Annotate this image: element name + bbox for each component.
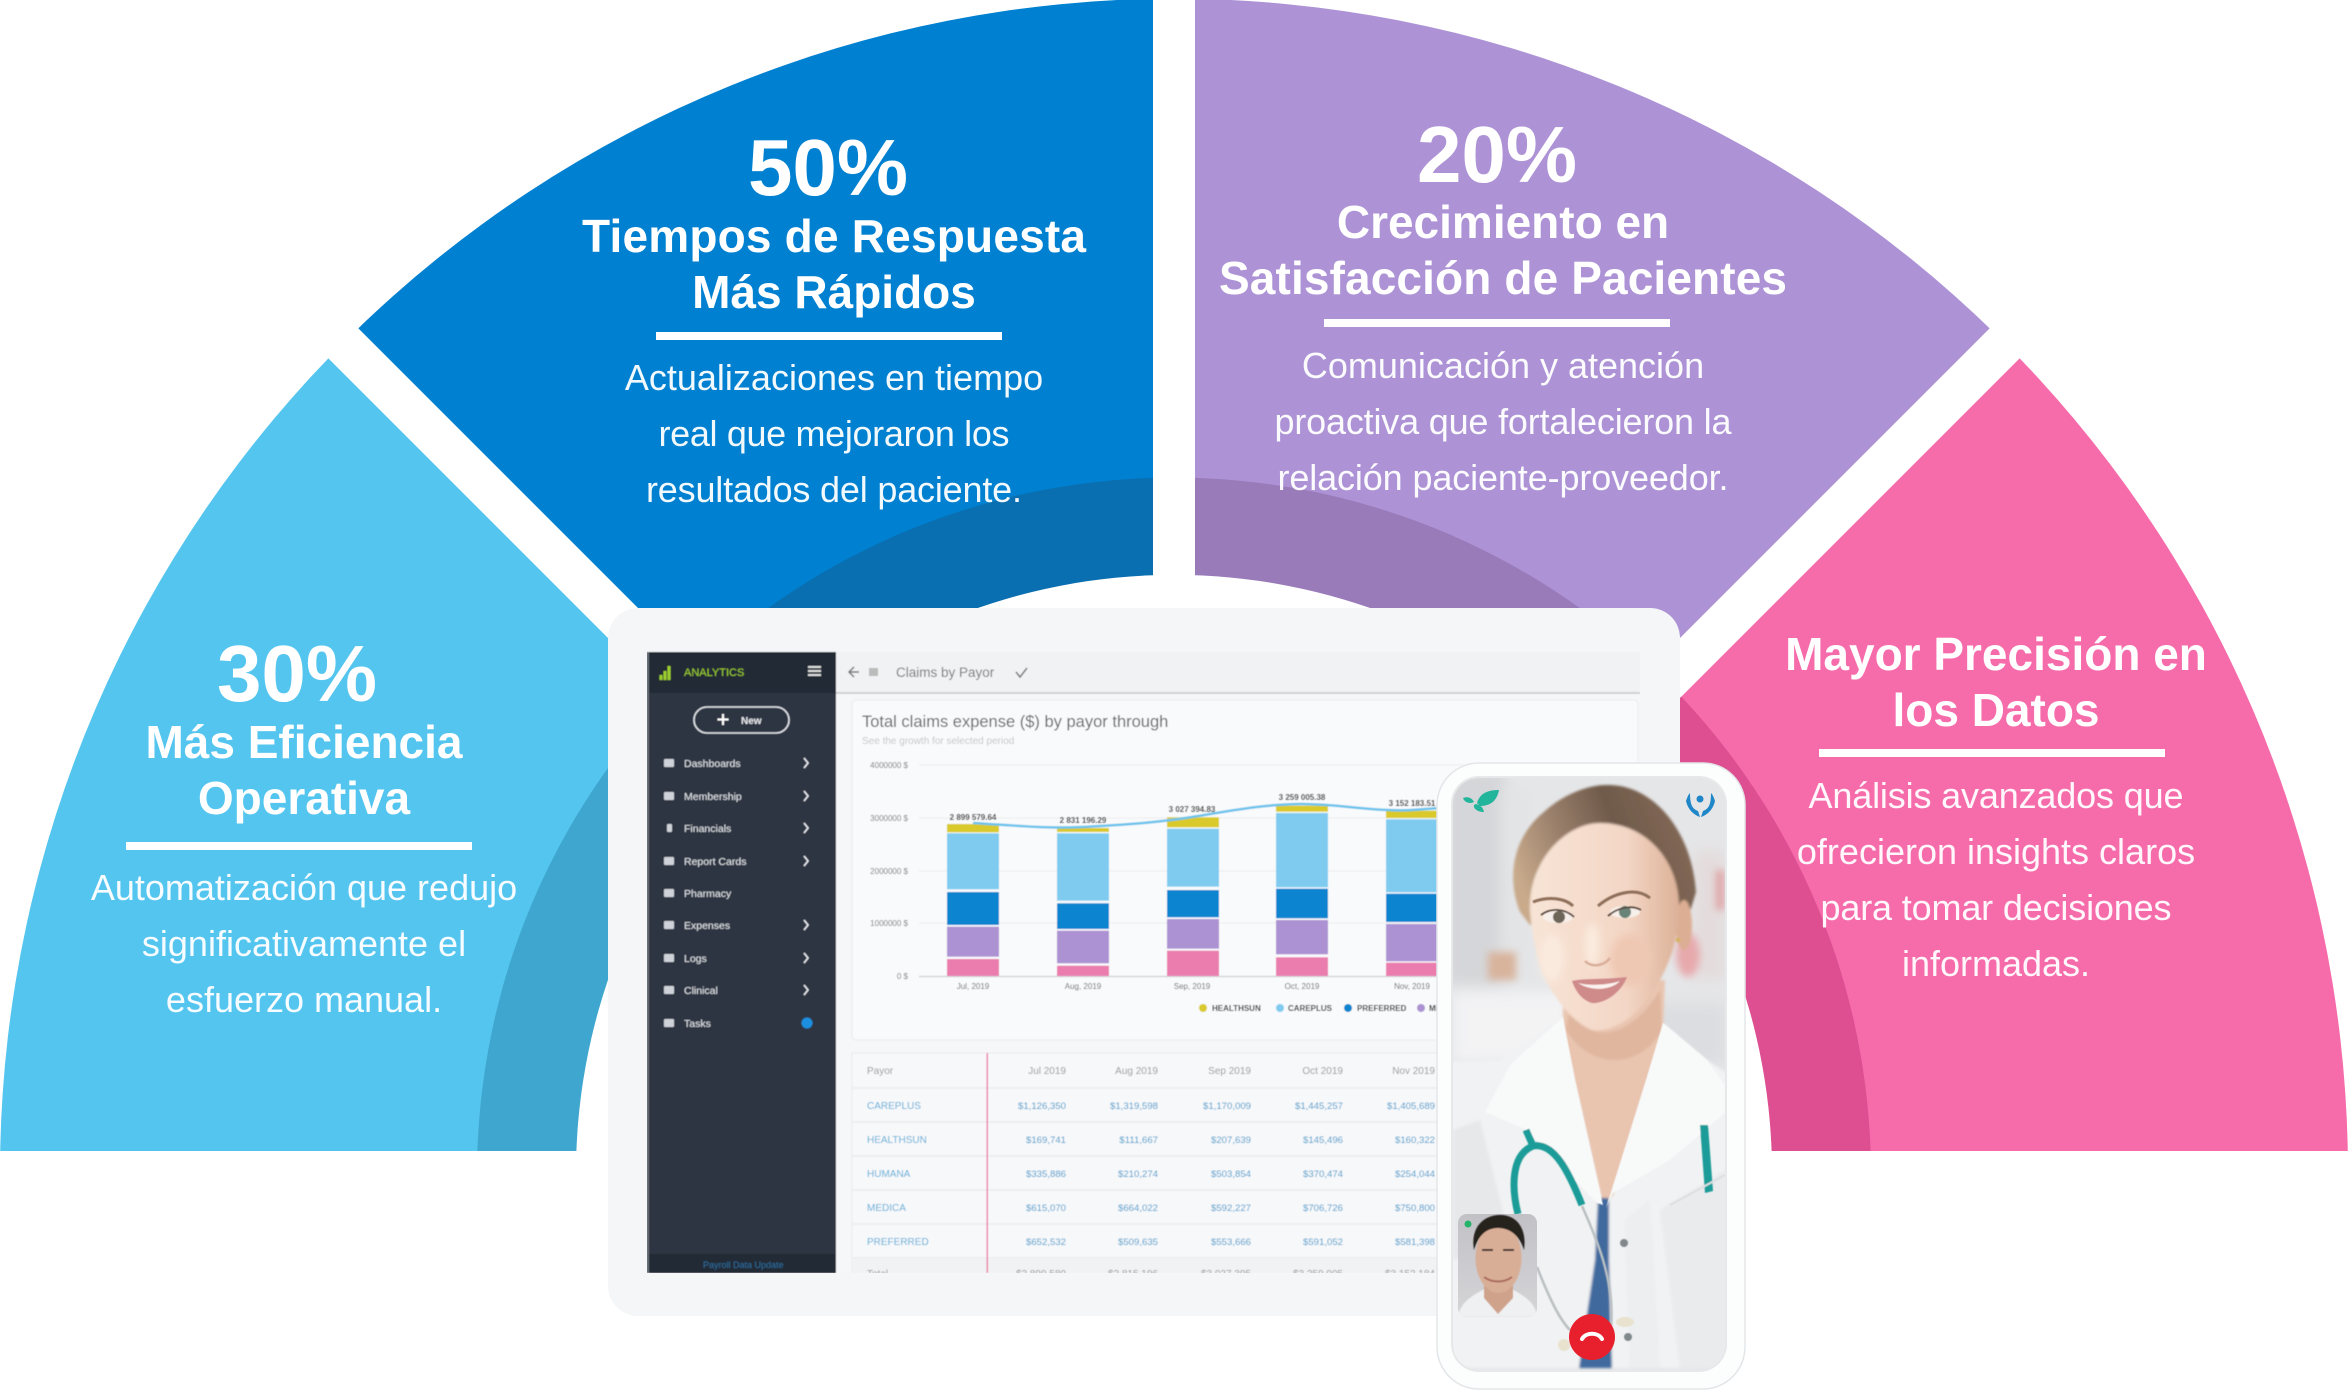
- payor table: $1,126,350: [1018, 1101, 1066, 1112]
- neck and chest: [1563, 980, 1665, 1205]
- sidebar navigation: Report Cards: [684, 856, 746, 868]
- text block: 50%: 50%: [748, 123, 908, 212]
- text block: 30%: Automatización que redujo: [91, 867, 517, 908]
- sidebar navigation: Logs: [684, 953, 707, 965]
- sidebar navigation: [646, 652, 836, 1273]
- payor table: HEALTHSUN: [867, 1135, 927, 1146]
- text block: 20%: Comunicación y atención: [1302, 345, 1704, 386]
- text block: 20%: Satisfacción de Pacientes: [1219, 252, 1787, 304]
- text block: 50%: Actualizaciones en tiempo: [625, 357, 1043, 398]
- stacked bars: [947, 806, 1438, 976]
- payor table: $169,741: [1026, 1135, 1066, 1146]
- text block: 50%: resultados del paciente.: [646, 469, 1022, 510]
- eyes and brows: [1533, 899, 1573, 906]
- text block: 30%: 30%: [217, 629, 377, 718]
- chart card: total claims expense: Nov, 2019: [1394, 982, 1430, 991]
- tablet frame: [608, 608, 1680, 1316]
- ear: [1676, 900, 1692, 950]
- payor table: Sep 2019: [1208, 1066, 1251, 1077]
- chart card: total claims expense: Total claims expense ($) by payor through: [862, 713, 1168, 731]
- text block: 30%: Más Eficiencia: [145, 716, 463, 768]
- chart card: total claims expense: 3 152 183.51: [1389, 799, 1436, 808]
- chart card: total claims expense: 2 831 196.29: [1060, 816, 1107, 825]
- payor table: Oct 2019: [1302, 1066, 1343, 1077]
- trend line: [973, 804, 1440, 828]
- text block: 20%: relación paciente-proveedor.: [1278, 457, 1728, 498]
- panel: mayor precision wedge: [1680, 358, 2348, 1151]
- top bar: [835, 666, 1640, 694]
- payor table: $3,027,395: [1201, 1269, 1251, 1280]
- chart card: total claims expense: [862, 714, 1436, 1012]
- collars: [1524, 1017, 1604, 1206]
- text block: 50%: Tiempos de Respuesta: [582, 210, 1086, 262]
- payor table: Jul 2019: [1028, 1066, 1066, 1077]
- payor table: $335,886: [1026, 1169, 1066, 1180]
- icon: green leaf logo: [1463, 790, 1499, 812]
- payor table: $652,532: [1026, 1237, 1066, 1248]
- sidebar navigation: Expenses: [684, 920, 730, 932]
- payor table: $592,227: [1211, 1203, 1251, 1214]
- chart card: total claims expense: 0 $: [897, 972, 909, 981]
- legend: CAREPLUS: [1288, 1004, 1333, 1013]
- legend: PREFERRED: [1357, 1004, 1407, 1013]
- text block: 20%: proactiva que fortalecieron la: [1274, 401, 1732, 442]
- payor table: $509,635: [1118, 1237, 1158, 1248]
- payor table: $1,445,257: [1295, 1101, 1343, 1112]
- sidebar navigation: Financials: [684, 823, 731, 835]
- payor table: $207,639: [1211, 1135, 1251, 1146]
- payor table: $581,398: [1395, 1237, 1435, 1248]
- payor table: $145,496: [1303, 1135, 1343, 1146]
- hair back: [1513, 785, 1696, 925]
- payor table: $3,259,005: [1293, 1269, 1343, 1280]
- text block: 50%: [582, 123, 1086, 510]
- chart card: total claims expense: 2000000 $: [870, 867, 909, 876]
- tablet screen: analytics dashboard: [646, 651, 1640, 1283]
- chart card: total claims expense: See the growth for selected period: [862, 736, 1014, 747]
- chart card: total claims expense: Oct, 2019: [1285, 982, 1320, 991]
- payor table: $503,854: [1211, 1169, 1252, 1180]
- chart card: total claims expense: 3000000 $: [870, 814, 909, 823]
- text block: 50%: Más Rápidos: [692, 266, 976, 318]
- text block: mayor precision: informadas.: [1902, 943, 2090, 984]
- chart card: total claims expense: Jul, 2019: [957, 982, 990, 991]
- chart card: total claims expense: Aug, 2019: [1065, 982, 1102, 991]
- panel: 20% satisfaccion wedge: [1195, 0, 1990, 638]
- nose: [1585, 958, 1610, 965]
- icon: care hands logo: [1686, 793, 1715, 817]
- panel: 50% tiempos de respuesta wedge: [358, 0, 1153, 608]
- chart card: total claims expense: Sep, 2019: [1174, 982, 1211, 991]
- payor table: [852, 1052, 1436, 1273]
- sidebar navigation: Payroll Data Update: [703, 1260, 784, 1270]
- payor table: $254,044: [1395, 1169, 1436, 1180]
- text block: 50%: real que mejoraron los: [658, 413, 1010, 454]
- sidebar navigation: New: [741, 716, 762, 727]
- sidebar navigation: Membership: [684, 791, 742, 803]
- legend: HEALTHSUN: [1212, 1004, 1261, 1013]
- picture in picture: patient: [1458, 1214, 1537, 1317]
- payor table: $750,800: [1395, 1203, 1435, 1214]
- payor table: $615,070: [1026, 1203, 1066, 1214]
- text block: 20%: 20%: [1417, 110, 1577, 199]
- payor table: $160,322: [1395, 1135, 1435, 1146]
- legend: MEDICA: [1429, 1004, 1461, 1013]
- doctor coat: [1453, 1061, 1725, 1369]
- payor table: $1,405,689: [1387, 1101, 1435, 1112]
- icon: end call button: [1569, 1314, 1615, 1360]
- text block: mayor precision: [1785, 628, 2207, 984]
- sidebar navigation: Clinical: [684, 985, 718, 997]
- legend: [1199, 1004, 1461, 1013]
- photo: doctor on video call: [1445, 770, 1735, 1370]
- chart card: total claims expense: 2 899 579.64: [950, 813, 997, 822]
- panel: 30% eficiencia operativa wedge: [0, 358, 608, 1151]
- payor table: PREFERRED: [867, 1237, 929, 1248]
- payor table: $591,052: [1303, 1237, 1343, 1248]
- text block: 30%: significativamente el: [142, 923, 466, 964]
- text block: 20%: [1219, 110, 1787, 498]
- chart card: total claims expense: 3 027 394.83: [1169, 805, 1216, 814]
- text block: mayor precision: los Datos: [1892, 684, 2100, 736]
- text block: 30%: esfuerzo manual.: [166, 979, 442, 1020]
- payor table: MEDICA: [867, 1203, 906, 1214]
- top bar: Claims by Payor: [896, 665, 995, 680]
- stethoscope: [1526, 1130, 1533, 1146]
- payor table: $1,170,009: [1203, 1101, 1251, 1112]
- payor table: Total: [867, 1269, 888, 1280]
- face: [1530, 823, 1679, 1030]
- payor table: $2,899,580: [1016, 1269, 1066, 1280]
- payor table: Payor: [867, 1066, 894, 1077]
- payor table: Nov 2019: [1392, 1066, 1435, 1077]
- text block: mayor precision: para tomar decisiones: [1820, 887, 2172, 928]
- payor table: CAREPLUS: [867, 1101, 921, 1112]
- text block: 20%: Crecimiento en: [1337, 196, 1669, 248]
- payor table: $111,667: [1119, 1135, 1158, 1146]
- payor table: $553,666: [1211, 1237, 1251, 1248]
- sidebar navigation: Dashboards: [684, 758, 741, 770]
- sidebar navigation: Tasks: [684, 1018, 711, 1030]
- sidebar navigation: ANALYTICS: [684, 667, 744, 679]
- mouth: [1572, 977, 1627, 1003]
- undershirt: [1579, 1198, 1612, 1368]
- payor table: $370,474: [1303, 1169, 1344, 1180]
- text block: 30%: [91, 629, 517, 1020]
- payor table: $2,815,196: [1108, 1269, 1158, 1280]
- payor table: Aug 2019: [1115, 1066, 1158, 1077]
- payor table: $210,274: [1118, 1169, 1159, 1180]
- text block: 30%: Operativa: [198, 772, 411, 824]
- payor table: $1,319,598: [1110, 1101, 1158, 1112]
- payor table: HUMANA: [867, 1169, 911, 1180]
- chart card: total claims expense: 4000000 $: [870, 761, 909, 770]
- text block: mayor precision: Mayor Precisión en: [1785, 628, 2207, 680]
- payor table: $664,022: [1118, 1203, 1158, 1214]
- payor table: $3,152,184: [1385, 1269, 1435, 1280]
- text block: mayor precision: Análisis avanzados que: [1808, 775, 2184, 816]
- payor table: $706,726: [1303, 1203, 1343, 1214]
- sidebar navigation: Pharmacy: [684, 888, 732, 900]
- text block: mayor precision: ofrecieron insights claros: [1797, 831, 2195, 872]
- phone: video call: [1437, 763, 1745, 1389]
- chart card: total claims expense: 3 259 005.38: [1279, 793, 1326, 802]
- chart card: total claims expense: 1000000 $: [870, 919, 909, 928]
